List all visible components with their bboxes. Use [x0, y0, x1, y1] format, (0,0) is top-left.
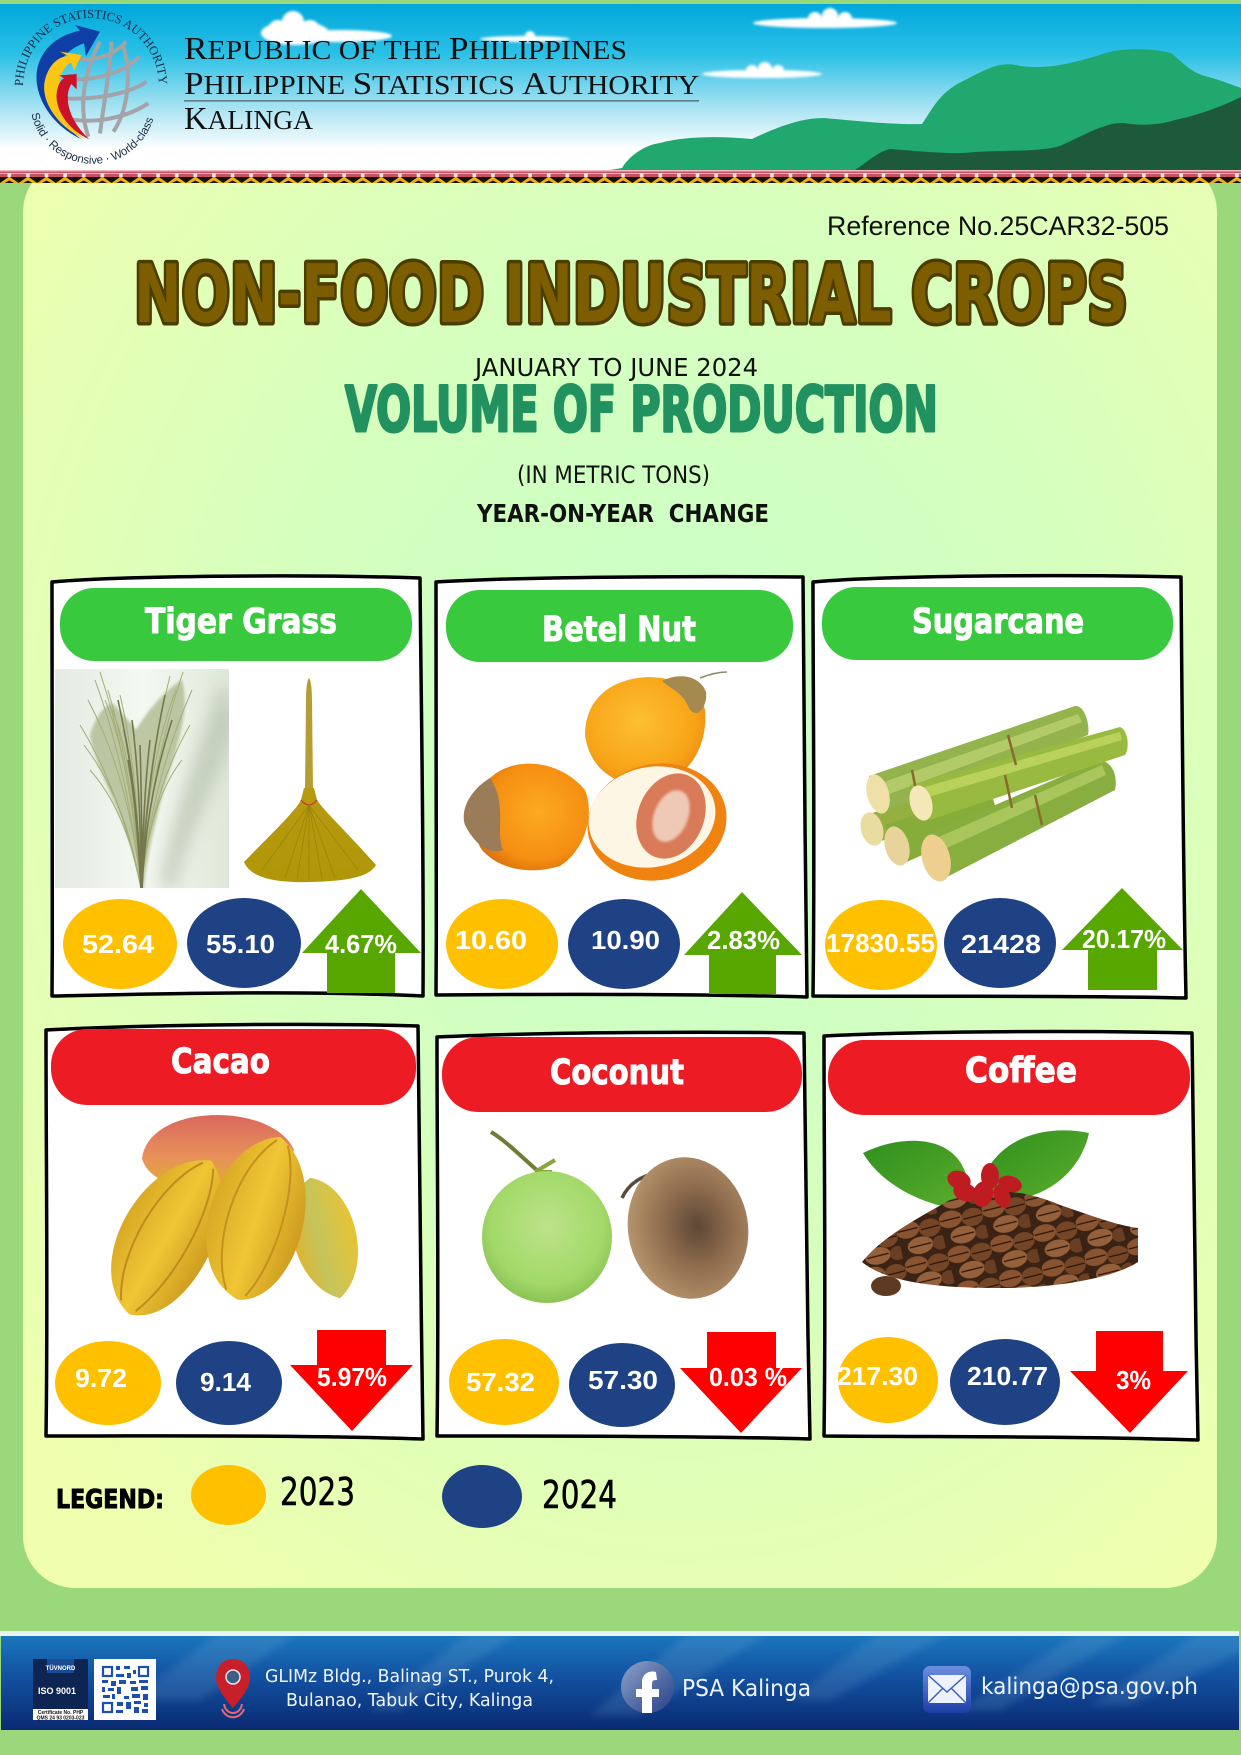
panel: cacao — [46, 1024, 423, 1439]
icon: location pin — [216, 1659, 250, 1717]
globe — [65, 42, 148, 137]
arrow down: change — [290, 1330, 413, 1431]
heading pill: Betel Nut — [542, 610, 696, 650]
panel: tiger grass — [52, 576, 423, 996]
arrow down: change — [1070, 1331, 1188, 1433]
arrow up: change — [684, 892, 802, 994]
arrow up: change: 20.17% — [1082, 924, 1166, 954]
value 2024: 10.90 — [591, 925, 660, 955]
logo: Philippine Statistics Authority: Solid · Responsive · World-class — [32, 113, 153, 164]
arrow up: change — [302, 889, 421, 993]
year-on-year heading: YEAR-ON-YEAR CHANGE — [476, 499, 769, 528]
icon: facebook — [621, 1661, 674, 1713]
certification badge ISO 9001: ISO 9001 — [38, 1686, 76, 1696]
image: mature coconut — [617, 1148, 759, 1308]
certification badge ISO 9001 — [33, 1659, 88, 1722]
value 2023 — [446, 899, 558, 989]
main panel — [23, 160, 1217, 1588]
value 2024 — [950, 1339, 1060, 1425]
value 2024 — [944, 898, 1056, 988]
value 2024: 9.14 — [200, 1367, 252, 1397]
legend 2023 — [191, 1465, 355, 1525]
arrow down: change: 0.03 % — [709, 1362, 787, 1392]
arrow up: change: 4.67% — [325, 929, 397, 959]
reference number: Reference No.25CAR32-505 — [827, 211, 1169, 241]
value 2023: 17830.55 — [826, 928, 935, 958]
arrow down: change: 3% — [1116, 1365, 1151, 1395]
unit note: (IN METRIC TONS) — [517, 461, 710, 489]
address: Bulanao, Tabuk City, Kalinga — [286, 1690, 533, 1711]
legend 2023: 2023 — [280, 1470, 355, 1514]
image: coffee beans and leaves — [862, 1130, 1138, 1296]
heading pill: Cacao — [171, 1042, 270, 1082]
heading pill — [51, 1029, 416, 1105]
panel: sugarcane — [813, 576, 1186, 998]
QR code — [94, 1659, 156, 1720]
header text: REPUBLIC OF THE PHILIPPINES — [184, 30, 627, 66]
legend 2024: 2024 — [542, 1473, 617, 1517]
legend 2024 — [442, 1465, 617, 1528]
value 2024 — [176, 1341, 282, 1425]
decorative woven border — [0, 170, 1241, 183]
facebook name: PSA Kalinga — [682, 1676, 811, 1702]
header banner — [0, 4, 1241, 170]
value 2023: 52.64 — [82, 929, 155, 959]
value 2024: 21428 — [961, 929, 1041, 959]
value 2023: 57.32 — [466, 1367, 535, 1397]
heading pill: Sugarcane — [912, 602, 1084, 642]
value 2023: 217.30 — [837, 1361, 918, 1391]
image: betel nuts — [464, 672, 738, 893]
value 2023 — [837, 1337, 938, 1423]
email address: kalinga@psa.gov.ph — [981, 1674, 1198, 1700]
value 2023: 10.60 — [455, 925, 527, 955]
logo: Philippine Statistics Authority: PHILIPPINE STATISTICS AUTHORITY — [14, 10, 168, 86]
heading pill — [822, 587, 1173, 660]
date subtitle: JANUARY TO JUNE 2024 — [473, 353, 758, 382]
image: green coconut — [482, 1132, 612, 1303]
legend: LEGEND: — [56, 1485, 164, 1515]
arrow down: change — [680, 1332, 802, 1433]
address — [265, 1666, 554, 1711]
heading pill: Coffee — [965, 1051, 1077, 1091]
value 2024: 210.77 — [967, 1361, 1048, 1391]
certification badge ISO 9001: TÜVNORD — [46, 1665, 76, 1672]
address: GLIMz Bldg., Balinag ST., Purok 4, — [265, 1666, 554, 1687]
value 2023: 9.72 — [75, 1363, 127, 1393]
image: tiger grass plume — [55, 669, 240, 888]
header text: PHILIPPINE STATISTICS AUTHORITY — [184, 65, 699, 101]
heading pill: Tiger Grass — [145, 602, 337, 642]
value 2024: 57.30 — [588, 1365, 658, 1395]
certification badge ISO 9001: Certificate No. PHP — [38, 1710, 84, 1716]
image: sugarcane stalks — [857, 706, 1128, 885]
arrow up: change: 2.83% — [707, 925, 780, 955]
value 2024 — [187, 898, 301, 988]
value 2023 — [55, 1341, 161, 1425]
image: soft broom — [244, 678, 376, 882]
panel: betel nut — [436, 577, 807, 997]
icon: email — [923, 1666, 971, 1713]
value 2023 — [449, 1339, 559, 1425]
value 2024: 55.10 — [206, 929, 275, 959]
value 2024 — [569, 1343, 675, 1427]
arrow down: change: 5.97% — [317, 1362, 387, 1392]
image: cacao pods — [84, 1115, 371, 1334]
heading pill — [828, 1040, 1190, 1115]
certification badge ISO 9001: QMS 24 93 0203-023 — [37, 1716, 85, 1722]
value 2023 — [825, 900, 937, 990]
heading pill: Coconut — [550, 1053, 684, 1093]
arrows — [36, 25, 100, 139]
header text: KALINGA — [184, 100, 314, 136]
logo: Philippine Statistics Authority — [14, 10, 168, 164]
subtitle: volume of production: VOLUME OF PRODUCTION — [345, 373, 938, 446]
value 2023 — [63, 899, 177, 989]
heading pill — [442, 1037, 802, 1112]
panel: coconut — [437, 1032, 810, 1439]
mountains — [610, 49, 1241, 170]
footer bar — [0, 1631, 1241, 1730]
value 2024 — [568, 899, 680, 989]
header text — [184, 30, 699, 136]
heading pill — [60, 588, 412, 661]
legend — [56, 1465, 617, 1528]
heading pill — [446, 590, 793, 662]
panel: coffee — [824, 1032, 1198, 1440]
clouds — [261, 8, 897, 78]
arrow up: change — [1062, 888, 1183, 990]
